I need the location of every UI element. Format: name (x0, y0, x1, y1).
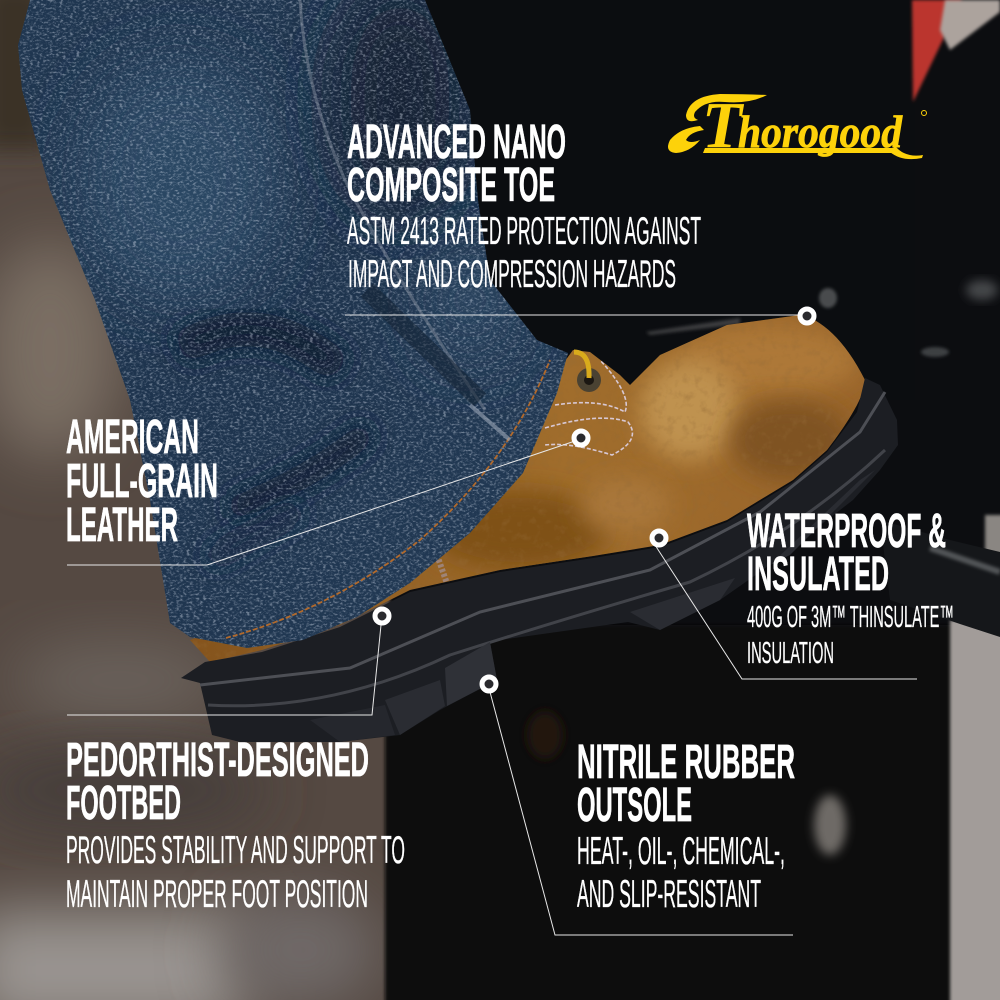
callout: pedorthist-designed footbed: FOOTBED (66, 777, 181, 830)
orange hem stitch (226, 360, 550, 638)
jeans (0, 0, 600, 660)
callout: advanced nano composite toe: ADVANCED NANO (347, 116, 566, 169)
callout: american full-grain leather: AMERICAN (66, 411, 199, 464)
leader lines (67, 315, 917, 935)
callout: pedorthist-designed footbed: PEDORTHIST-DESIGNED (66, 734, 369, 787)
callout: waterproof and insulated: INSULATION (747, 635, 834, 670)
callout: nitrile rubber outsole: OUTSOLE (577, 779, 692, 832)
marker: toe (800, 309, 814, 323)
callout: pedorthist-designed footbed: MAINTAIN PROPER FOOT POSITION (66, 873, 368, 916)
text: PROVIDES STABILITY AND SUPPORT TO (66, 829, 405, 872)
callout: american full-grain leather: FULL-GRAIN (66, 455, 218, 508)
callout: american full-grain leather: LEATHER (66, 499, 178, 552)
pipe on the right (880, 520, 1000, 637)
callout: advanced nano composite toe: COMPOSITE TOE (347, 159, 555, 212)
marker: outsole (482, 677, 496, 691)
boot upper (180, 300, 880, 670)
marker: waterproof (652, 531, 666, 545)
callout: nitrile rubber outsole: AND SLIP-RESISTANT (577, 873, 761, 916)
seam details on jeans (300, 0, 485, 410)
callout: american full-grain leather (66, 411, 218, 552)
callout: waterproof and insulated (747, 505, 954, 670)
logo: Thorogood: horogood (738, 106, 903, 157)
callout: nitrile rubber outsole: NITRILE RUBBER (577, 736, 795, 789)
logo: Thorogood (668, 89, 926, 162)
callout: advanced nano composite toe (347, 116, 701, 296)
marker: footbed (375, 609, 389, 623)
boot sole (181, 378, 898, 742)
callout: nitrile rubber outsole (577, 736, 795, 916)
logo: Thorogood: T (702, 89, 745, 162)
callout: pedorthist-designed footbed (66, 734, 405, 916)
marker: leather (574, 431, 588, 445)
eyelet and lace (577, 368, 601, 392)
